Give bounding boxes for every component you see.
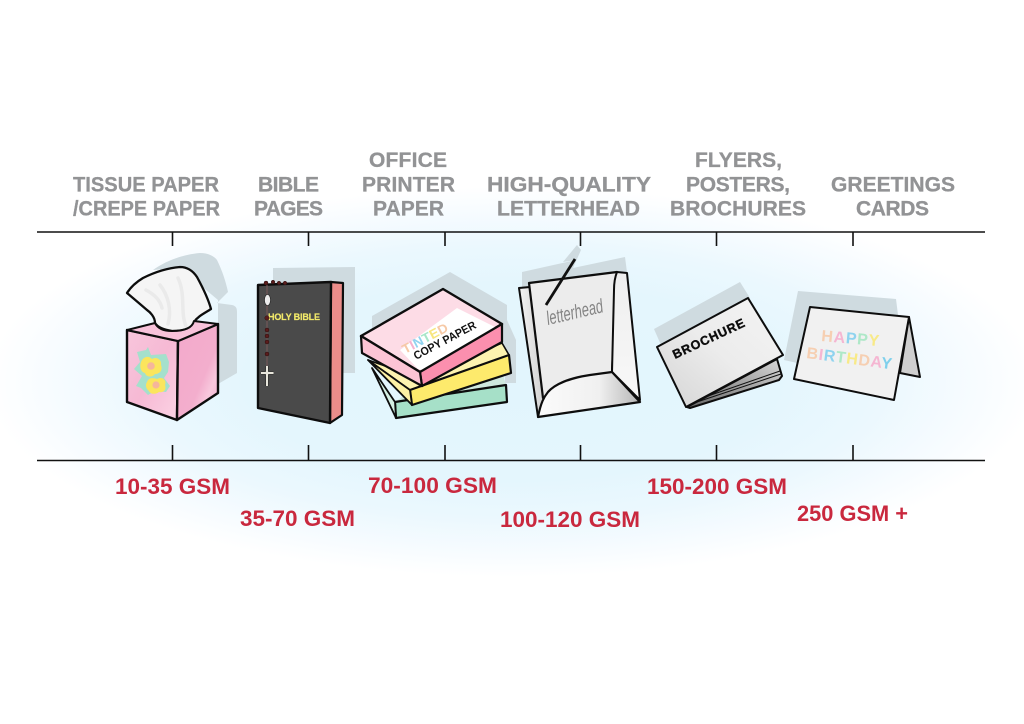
title: HOLY BIBLE xyxy=(268,312,320,322)
heading: tissue paper: TISSUE PAPER xyxy=(73,174,219,196)
heading: flyers posters brochures: POSTERS, xyxy=(686,174,790,196)
shadow xyxy=(153,253,237,384)
card front xyxy=(794,307,909,400)
heading: office printer paper: PRINTER xyxy=(362,174,455,196)
heading: office printer paper: OFFICE xyxy=(369,149,447,172)
gsm: 250+: 250 GSM + xyxy=(797,501,908,526)
rosary xyxy=(261,280,287,386)
back fold xyxy=(900,317,920,377)
illustration: copy paper stack xyxy=(361,272,516,418)
box front xyxy=(127,330,178,420)
heading: greetings cards: GREETINGS xyxy=(831,174,955,196)
shadow xyxy=(372,272,516,383)
GSM labels xyxy=(115,473,908,532)
greeting xyxy=(805,328,893,373)
brochure title: BROCHURE xyxy=(670,316,747,362)
heading: tissue paper xyxy=(73,174,220,220)
back pocket left xyxy=(519,287,560,417)
background glow xyxy=(0,187,1024,577)
box side xyxy=(177,324,218,420)
heading: high-quality letterhead: HIGH-QUALITY xyxy=(487,174,651,196)
flowers xyxy=(134,347,170,395)
pages xyxy=(687,359,782,408)
bottom scale line xyxy=(37,445,985,460)
pink ream front xyxy=(420,324,502,386)
heading: bible pages: BIBLE xyxy=(258,174,319,196)
green ream xyxy=(372,368,507,418)
heading: bible pages: PAGES xyxy=(254,198,323,220)
gsm: 10-35: 10-35 GSM xyxy=(115,474,230,499)
illustration: holy bible xyxy=(258,267,355,423)
cover xyxy=(657,298,783,407)
gsm: 100-120: 100-120 GSM xyxy=(500,507,640,532)
heading: greetings cards: CARDS xyxy=(856,198,929,220)
headings xyxy=(73,149,955,220)
illustration: letterhead folder xyxy=(519,245,640,417)
white band xyxy=(400,308,497,370)
shadow xyxy=(784,291,898,363)
gsm: 35-70: 35-70 GSM xyxy=(240,506,355,531)
tissue xyxy=(127,267,211,331)
heading: office printer paper xyxy=(362,149,455,220)
label: COPY PAPER xyxy=(412,319,479,363)
illustration: brochure xyxy=(654,282,783,408)
label xyxy=(399,307,479,366)
right flap xyxy=(612,272,640,400)
cover xyxy=(258,282,331,423)
top scale line xyxy=(37,232,985,246)
heading: high-quality letterhead: LETTERHEAD xyxy=(497,198,640,220)
yellow ream xyxy=(368,343,511,405)
box top xyxy=(127,321,218,341)
bottom pocket xyxy=(538,372,640,417)
shadow xyxy=(522,245,628,292)
heading: high-quality letterhead xyxy=(487,174,651,220)
paper sheet xyxy=(529,272,617,398)
heading: tissue paper: /CREPE PAPER xyxy=(73,198,220,220)
letterhead script: letterhead xyxy=(544,296,606,330)
heading: greetings cards xyxy=(831,174,955,220)
illustration: greetings card xyxy=(784,291,920,400)
greeting: HAPPY xyxy=(821,328,880,350)
pink ream top xyxy=(361,289,502,372)
pages xyxy=(330,282,343,423)
heading: flyers posters brochures xyxy=(670,149,806,220)
heading: flyers posters brochures: BROCHURES xyxy=(670,198,806,220)
illustration: tissue box xyxy=(127,253,237,420)
heading: flyers posters brochures: FLYERS, xyxy=(695,149,782,172)
shadow xyxy=(654,282,750,345)
label: TINTED xyxy=(399,320,451,357)
greeting: BIRTHDAY xyxy=(805,345,893,373)
pink ream side xyxy=(361,336,422,386)
heading: office printer paper: PAPER xyxy=(373,198,444,220)
shadow xyxy=(273,267,355,373)
heading: bible pages xyxy=(254,174,323,220)
pen xyxy=(546,259,575,305)
gsm: 150-200: 150-200 GSM xyxy=(647,474,787,499)
gsm: 70-100: 70-100 GSM xyxy=(368,473,497,498)
